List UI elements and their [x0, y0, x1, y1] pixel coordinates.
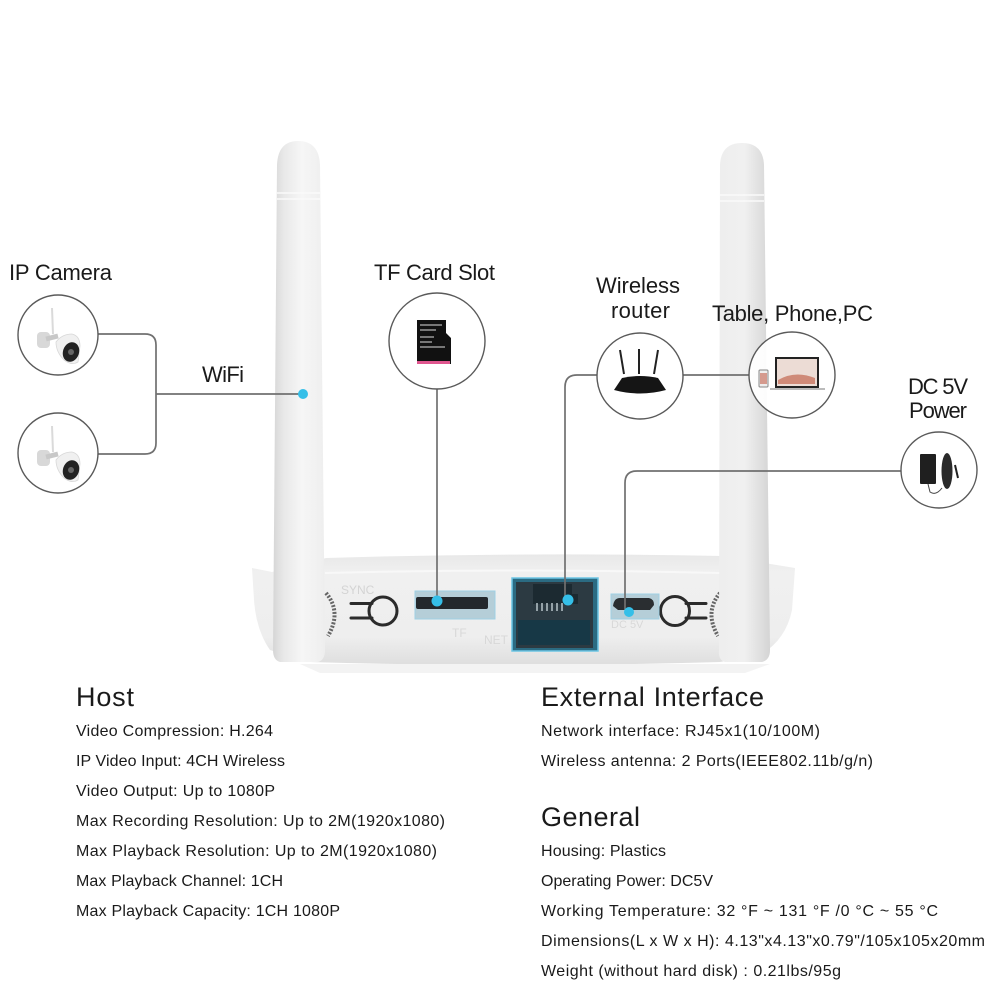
spec list: Host [76, 723, 445, 920]
spec list: General [541, 843, 985, 980]
icon: left knob [326, 593, 335, 636]
panel: Host [76, 682, 445, 920]
circle: IP camera 1 [18, 295, 98, 375]
connector lines [98, 334, 901, 610]
heading: Host: Host [76, 682, 134, 712]
label: DC 5V Power [908, 374, 968, 423]
spec list: Host: Max Playback Resolution: Up to 2M(1920x1080) [76, 843, 437, 860]
label: Wireless router: Wireless [596, 273, 680, 298]
spec list: External Interface: Wireless antenna: 2 Ports(IEEE802.11b/g/n) [541, 753, 873, 770]
icon: sync button [351, 597, 397, 625]
panel: External Interface [541, 682, 873, 770]
label: IP Camera: IP Camera [9, 260, 113, 285]
port label: DC 5V: DC 5V [611, 619, 644, 631]
left antenna [273, 141, 325, 662]
spec list: Host: Video Output: Up to 1080P [76, 783, 275, 800]
spec list: General: Operating Power: DC5V [541, 873, 713, 890]
spec list: Host: Max Recording Resolution: Up to 2M(1920x1080) [76, 813, 445, 830]
spec list: External Interface: Network interface: RJ45x1(10/100M) [541, 723, 820, 740]
port label: TF: TF [452, 626, 467, 640]
spec list: Host: Max Playback Capacity: 1CH 1080P [76, 903, 340, 920]
circle: IP camera 2 [18, 413, 98, 493]
icon: reset button [660, 596, 706, 626]
circle: wireless router [597, 333, 683, 419]
spec list: Host: IP Video Input: 4CH Wireless [76, 753, 285, 770]
circle: table, phone, PC [749, 332, 835, 418]
label: WiFi: WiFi [202, 362, 244, 387]
label: DC 5V Power: Power [909, 398, 967, 423]
TF slot highlight [415, 591, 495, 619]
heading: External Interface: External Interface [541, 682, 764, 712]
connection dots [298, 389, 634, 617]
micro USB port highlight [611, 594, 659, 619]
label: Wireless router [596, 273, 680, 323]
right antenna [719, 143, 770, 662]
spec list: Host: Video Compression: H.264 [76, 723, 273, 740]
spec list: External Interface [541, 723, 873, 770]
label: TF Card Slot: TF Card Slot [374, 260, 495, 285]
label: Wireless router: router [611, 298, 670, 323]
spec list: General: Working Temperature: 32 °F ~ 131 °F /0 °C ~ 55 °C [541, 903, 938, 920]
circle: DC power [901, 432, 977, 508]
network port highlight [512, 578, 598, 651]
port label: SYNC: SYNC [341, 583, 375, 597]
icon: right knob [711, 593, 720, 636]
spec list: General: Housing: Plastics [541, 843, 666, 860]
spec list: General: Dimensions(L x W x H): 4.13"x4.13"x0.79"/105x105x20mm [541, 933, 985, 950]
heading: General: General [541, 802, 640, 832]
port label: NET: NET [484, 633, 509, 647]
circle: TF card [389, 293, 485, 389]
spec list: Host: Max Playback Channel: 1CH [76, 873, 283, 890]
router body [252, 554, 795, 673]
spec list: General: Weight (without hard disk) : 0.21lbs/95g [541, 963, 841, 980]
panel: General [541, 802, 985, 980]
label: DC 5V Power: DC 5V [908, 374, 968, 399]
label: Table, Phone, PC: Table, Phone,PC [712, 301, 873, 326]
